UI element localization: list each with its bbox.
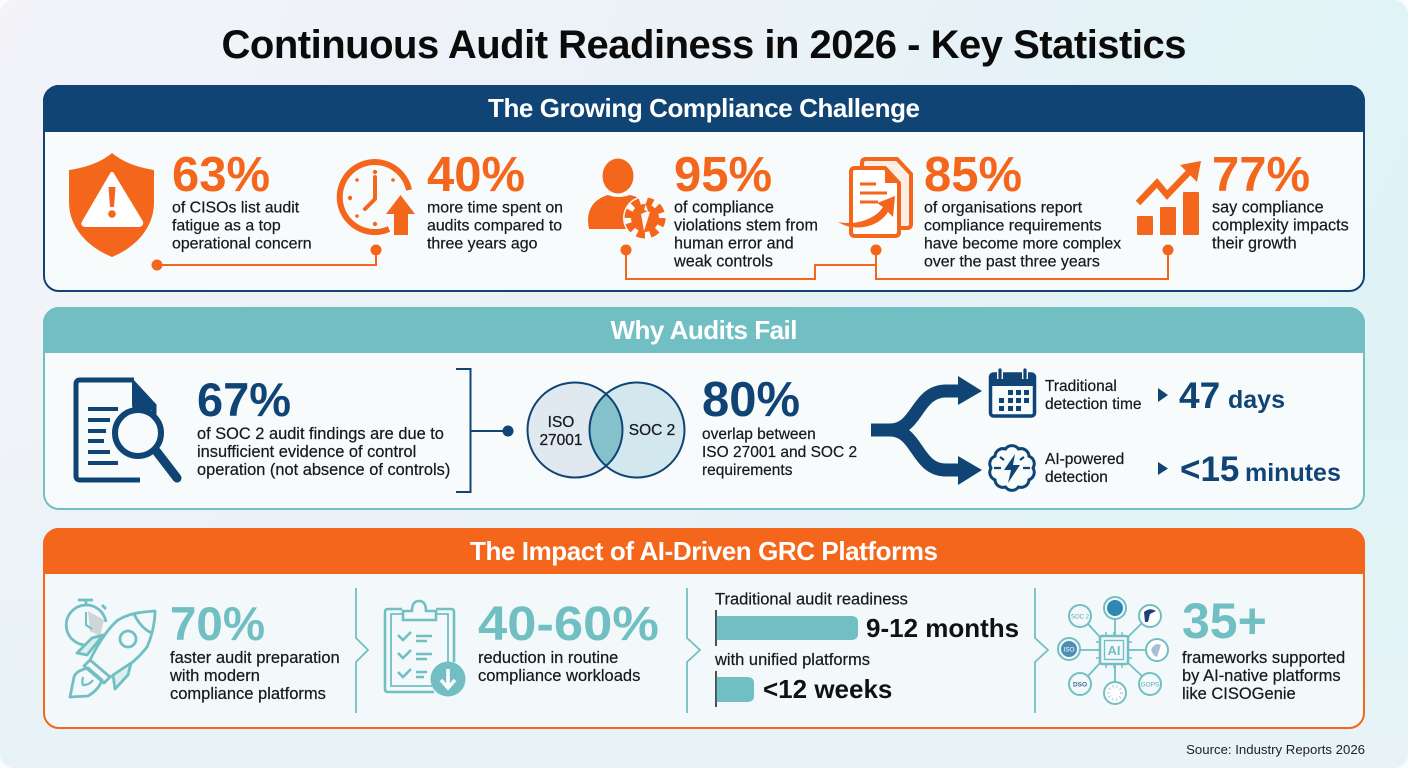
stat: traditional detection: 47 bbox=[1179, 375, 1220, 416]
icon: AI hub with frameworks: ISO bbox=[1063, 646, 1075, 654]
icon: document with magnifier bbox=[76, 378, 177, 480]
stat: 95%: 95% bbox=[674, 148, 772, 202]
panel: The Impact of AI-Driven GRC Platforms bbox=[43, 528, 1365, 728]
stat: 77% bbox=[1212, 148, 1349, 252]
stat: 95%: weak controls bbox=[673, 252, 773, 270]
stat: 70%: 70% bbox=[170, 598, 265, 651]
stat: 35+: 35+ bbox=[1182, 593, 1267, 649]
icon: clock with up arrow bbox=[340, 162, 415, 235]
stat: 85%: 85% bbox=[924, 148, 1022, 202]
stat: 80%: ISO 27001 and SOC 2 bbox=[702, 444, 857, 461]
stat: 40%: three years ago bbox=[427, 236, 538, 252]
comparison bars: audit readiness: <12 weeks bbox=[763, 674, 892, 704]
icon: clipboard with download bbox=[385, 601, 466, 696]
venn diagram bbox=[528, 382, 684, 478]
stat: 40-60%: compliance workloads bbox=[478, 667, 640, 685]
stat: AI-powered detection: AI-powered bbox=[1045, 451, 1124, 468]
stat: 40-60%: reduction in routine bbox=[478, 649, 618, 667]
stat: 85%: over the past three years bbox=[924, 254, 1100, 270]
icon: AI hub with frameworks: GOPS bbox=[1141, 682, 1160, 688]
venn diagram: 27001 bbox=[539, 432, 583, 449]
stat: traditional detection: detection time bbox=[1045, 396, 1142, 413]
stat: 77%: complexity impacts bbox=[1212, 216, 1349, 234]
stat: 77%: 77% bbox=[1212, 148, 1310, 202]
stat: 80%: 80% bbox=[702, 373, 800, 427]
stat: 77%: their growth bbox=[1212, 234, 1297, 252]
stat: 80%: requirements bbox=[702, 462, 793, 479]
chevron dividers bbox=[356, 588, 1048, 713]
stat: 95%: violations stem from bbox=[674, 216, 818, 234]
stat: AI-powered detection: minutes bbox=[1245, 459, 1341, 487]
icon: calendar bbox=[990, 370, 1035, 416]
stat: 35+: frameworks supported bbox=[1182, 649, 1345, 667]
forked arrow bbox=[871, 376, 982, 485]
icon: person with broken gear bbox=[588, 158, 667, 240]
stat: 35+: like CISOGenie bbox=[1182, 685, 1296, 703]
icon: documents with arrow bbox=[838, 159, 911, 236]
stat: 85%: have become more complex bbox=[924, 236, 1121, 252]
stat: 40%: more time spent on bbox=[427, 200, 563, 216]
icon: AI hub with frameworks: SOC 2 bbox=[1071, 614, 1090, 620]
icon: rising bar chart bbox=[1137, 161, 1201, 235]
stat: 63% bbox=[172, 148, 312, 252]
panel heading: The Growing Compliance Challenge bbox=[488, 93, 920, 123]
stat: 63%: fatigue as a top bbox=[172, 218, 281, 234]
stat: 95%: human error and bbox=[674, 234, 794, 252]
stat: 40%: 40% bbox=[427, 148, 525, 202]
stat: 35+: by AI-native platforms bbox=[1182, 667, 1341, 685]
stat: AI-powered detection: detection bbox=[1045, 469, 1108, 486]
stat: 40% bbox=[427, 148, 563, 252]
stat: traditional detection: days bbox=[1228, 386, 1285, 414]
stat: 70%: compliance platforms bbox=[170, 685, 326, 703]
icon: stopwatch and rocket bbox=[66, 600, 155, 697]
panel: Why Audits Fail bbox=[43, 307, 1365, 509]
stat: 67% bbox=[197, 373, 450, 479]
stat: 85%: of organisations report bbox=[924, 200, 1083, 216]
panel heading: Why Audits Fail bbox=[610, 315, 798, 345]
icon: AI brain bbox=[990, 446, 1034, 490]
stat: 70% bbox=[169, 598, 340, 703]
stat: 70%: with modern bbox=[169, 667, 260, 685]
stat: AI-powered detection: <15 bbox=[1180, 450, 1239, 489]
icon: AI hub with frameworks: DSO bbox=[1073, 682, 1087, 688]
comparison bars: audit readiness: 9-12 months bbox=[866, 613, 1019, 643]
stat: 80% bbox=[702, 373, 857, 479]
panel heading bbox=[43, 85, 1365, 132]
stat: 85% bbox=[924, 148, 1121, 270]
stat: 85%: compliance requirements bbox=[924, 218, 1102, 234]
icon: AI hub with frameworks bbox=[1058, 597, 1168, 704]
source note: Source: Industry Reports 2026 bbox=[1186, 742, 1365, 757]
venn diagram: SOC 2 bbox=[629, 422, 675, 439]
stat: traditional detection bbox=[1045, 375, 1285, 416]
stat: AI-powered detection bbox=[1045, 450, 1341, 489]
connector lines bbox=[152, 244, 1174, 279]
stat: 63%: operational concern bbox=[172, 236, 312, 252]
title: Continuous Audit Readiness in 2026 - Key Statistics bbox=[222, 23, 1186, 67]
stat: 40-60%: 40-60% bbox=[478, 598, 659, 651]
stat: traditional detection: Traditional bbox=[1045, 378, 1117, 395]
icon: AI hub with frameworks: AI bbox=[1108, 643, 1120, 658]
comparison bars: audit readiness: with unified platforms bbox=[714, 651, 870, 669]
stat: 67%: of SOC 2 audit findings are due to bbox=[197, 425, 444, 443]
stat: 77%: say compliance bbox=[1212, 198, 1324, 216]
panel heading: The Impact of AI-Driven GRC Platforms bbox=[470, 536, 938, 566]
stat: 67%: 67% bbox=[197, 373, 291, 426]
stat: 40-60% bbox=[478, 598, 659, 685]
stat: 40%: audits compared to bbox=[427, 218, 562, 234]
panel heading bbox=[43, 307, 1365, 353]
stat: 63%: 63% bbox=[172, 148, 270, 202]
stat: 35+ bbox=[1182, 593, 1345, 703]
venn diagram: ISO bbox=[548, 414, 574, 431]
bracket connector bbox=[456, 369, 514, 492]
stat: 67%: insufficient evidence of control bbox=[197, 443, 416, 461]
stat: 80%: overlap between bbox=[702, 426, 816, 443]
comparison bars: audit readiness bbox=[714, 590, 1019, 707]
stat: 63%: of CISOs list audit bbox=[172, 200, 300, 216]
panel: The Growing Compliance Challenge bbox=[43, 85, 1365, 291]
stat: 95% bbox=[673, 148, 818, 270]
comparison bars: audit readiness: Traditional audit readiness bbox=[715, 590, 908, 608]
stat: 95%: of compliance bbox=[674, 198, 774, 216]
stat: 67%: operation (not absence of controls) bbox=[197, 461, 450, 479]
panel heading bbox=[43, 528, 1365, 574]
stat: 70%: faster audit preparation bbox=[170, 649, 340, 667]
icon: warning shield bbox=[69, 153, 154, 257]
